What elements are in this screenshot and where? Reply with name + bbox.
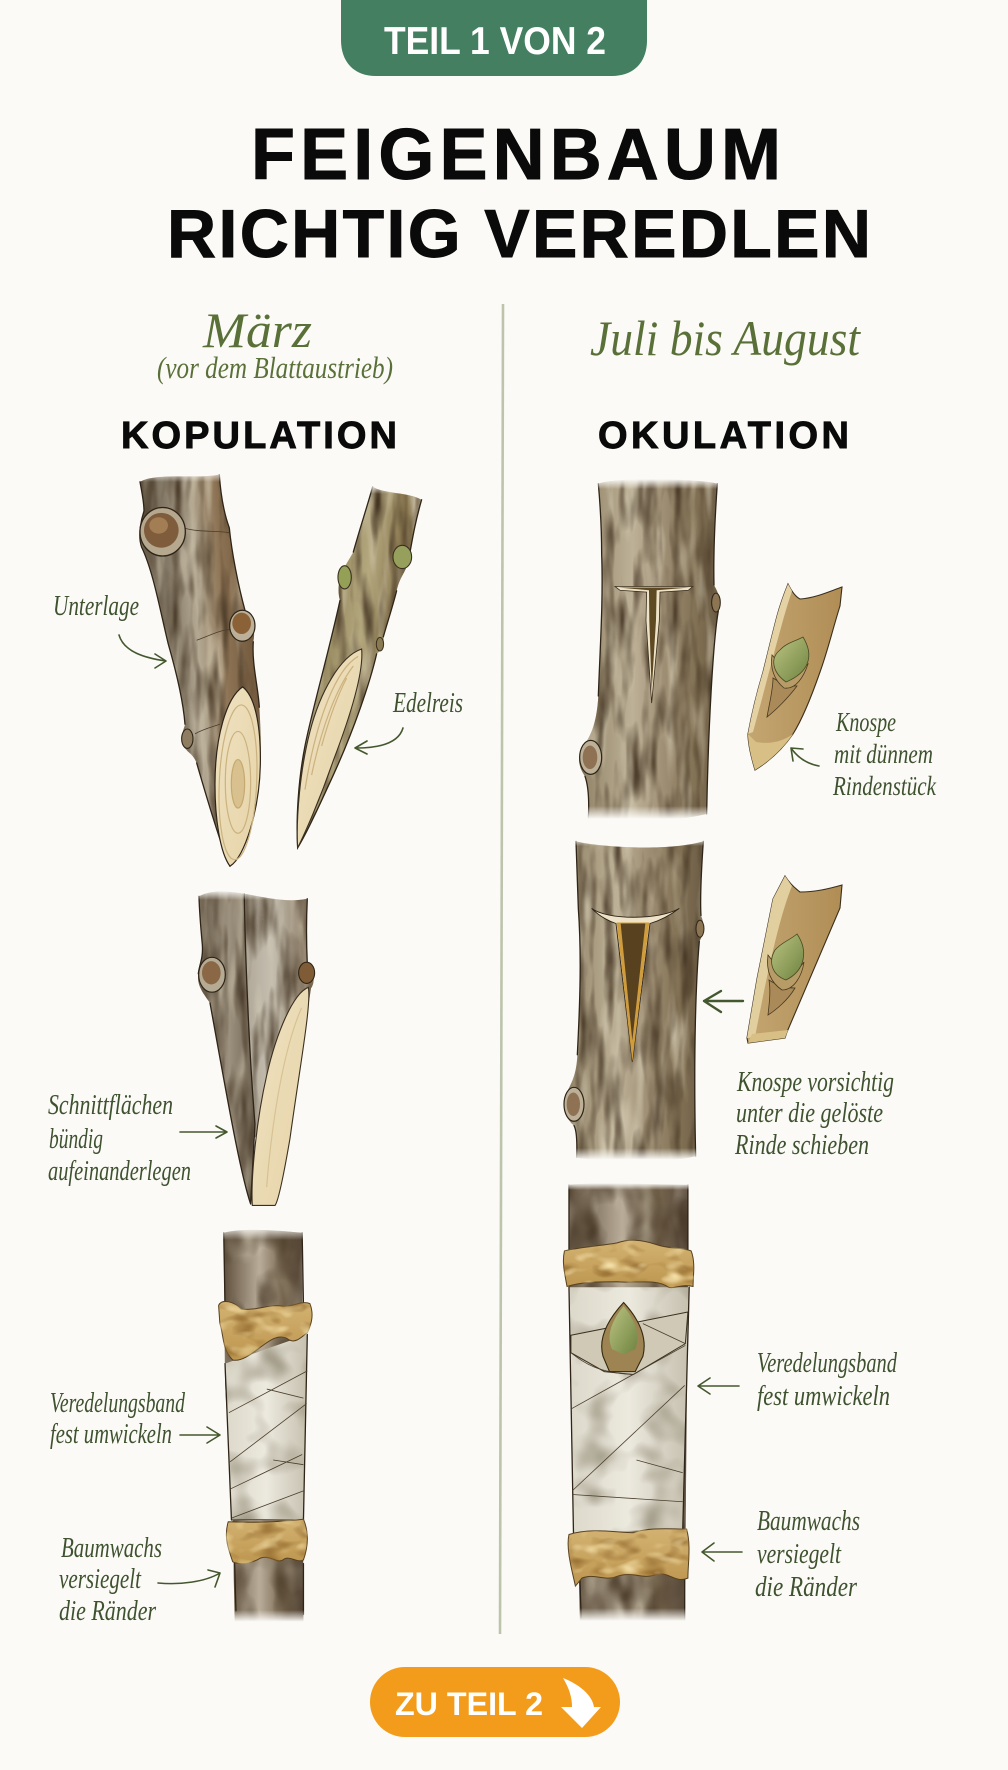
icon: bud two <box>768 934 804 1015</box>
label: Unterlage: Unterlage <box>53 591 139 622</box>
arrow: Baumwachs right <box>702 1543 742 1561</box>
label: Baumwachs left <box>59 1533 162 1627</box>
arrow: Veredelungsband left <box>180 1427 220 1443</box>
illustration: bud shield with thin bark <box>748 584 842 770</box>
column divider <box>500 304 503 1634</box>
heading: Okulation: OKULATION <box>598 415 849 457</box>
illustration: Unterlage rootstock <box>140 475 261 866</box>
label: Schnittflächen <box>48 1090 191 1187</box>
arrow: Knospe <box>791 748 819 766</box>
label: Baumwachs right: die Ränder <box>755 1571 858 1603</box>
illustration: T-cut trunk <box>579 479 720 822</box>
heading: Kopulation: KOPULATION <box>121 415 397 457</box>
heading: März timing: (vor dem Blattaustrieb) <box>157 350 393 385</box>
illustration: Edelreis scion <box>297 487 422 848</box>
label: Baumwachs right: Baumwachs <box>757 1505 860 1537</box>
badge: Teil 1 von 2 <box>341 0 647 76</box>
label: Baumwachs left: die Ränder <box>59 1596 156 1627</box>
label: Baumwachs right <box>755 1505 860 1603</box>
icon: bud one <box>767 637 809 717</box>
label: Veredelungsband left: fest umwickeln <box>50 1419 172 1450</box>
icon: bud in wrap window <box>602 1303 644 1372</box>
label: Baumwachs left: Baumwachs <box>61 1533 162 1564</box>
title <box>167 115 871 272</box>
label: Edelreis: Edelreis <box>392 688 463 719</box>
illustration: Okulation finished wrap <box>563 1183 694 1625</box>
label: Knospe mit dünnem Rindenstück: mit dünnem <box>834 739 933 769</box>
label: Knospe mit dünnem Rindenstück: Rindenstück <box>832 771 937 801</box>
label: Schnittflächen: aufeinanderlegen <box>48 1156 191 1187</box>
label: Veredelungsband right: fest umwickeln <box>757 1380 890 1412</box>
label: Schnittflächen: Schnittflächen <box>48 1090 173 1121</box>
arrow: Unterlage <box>119 635 166 668</box>
label: Veredelungsband right: Veredelungsband <box>757 1347 897 1379</box>
label: Knospe vorsichtig: unter die gelöste <box>736 1098 883 1129</box>
label: Veredelungsband left <box>50 1388 186 1450</box>
heading: März timing <box>157 302 393 385</box>
label: Knospe mit dünnem Rindenstück <box>832 707 937 801</box>
heading: Juli bis August timing: Juli bis August <box>590 310 861 366</box>
label: Knospe vorsichtig: Knospe vorsichtig <box>736 1067 894 1098</box>
arrow: Veredelungsband right <box>698 1378 739 1394</box>
button: zu Teil 2 <box>370 1667 620 1737</box>
icon: curved down arrow <box>561 1678 601 1728</box>
illustration: opened T-cut trunk <box>564 841 704 1162</box>
badge: Teil 1 von 2: TEIL 1 VON 2 <box>384 20 606 63</box>
label: Veredelungsband right <box>757 1347 897 1412</box>
panel: Kopulation cut pieces and joined stems <box>140 475 422 1205</box>
arrow: Baumwachs left <box>158 1570 220 1587</box>
label: Baumwachs right: versiegelt <box>757 1538 842 1570</box>
label: Baumwachs left: versiegelt <box>59 1564 142 1595</box>
illustration: Kopulation finished wrap <box>219 1230 312 1622</box>
label: Knospe mit dünnem Rindenstück: Knospe <box>835 707 896 737</box>
illustration: joined cut surfaces <box>198 891 315 1205</box>
torn stem end fades <box>130 470 725 1628</box>
label: Schnittflächen: bündig <box>49 1124 103 1155</box>
label: Knospe vorsichtig: Rinde schieben <box>734 1130 869 1161</box>
heading: März timing: März <box>202 302 312 358</box>
arrow: Edelreis <box>355 728 403 754</box>
button: zu Teil 2: ZU TEIL 2 <box>395 1686 543 1722</box>
illustration: bud shield being inserted <box>747 876 842 1043</box>
label: Veredelungsband left: Veredelungsband <box>50 1388 186 1419</box>
arrow: insert bud <box>704 991 743 1012</box>
title: RICHTIG VEREDLEN <box>167 196 871 272</box>
title: FEIGENBAUM <box>251 115 781 195</box>
arrow: Schnittflächen <box>180 1126 227 1138</box>
label: Knospe vorsichtig <box>734 1067 894 1161</box>
